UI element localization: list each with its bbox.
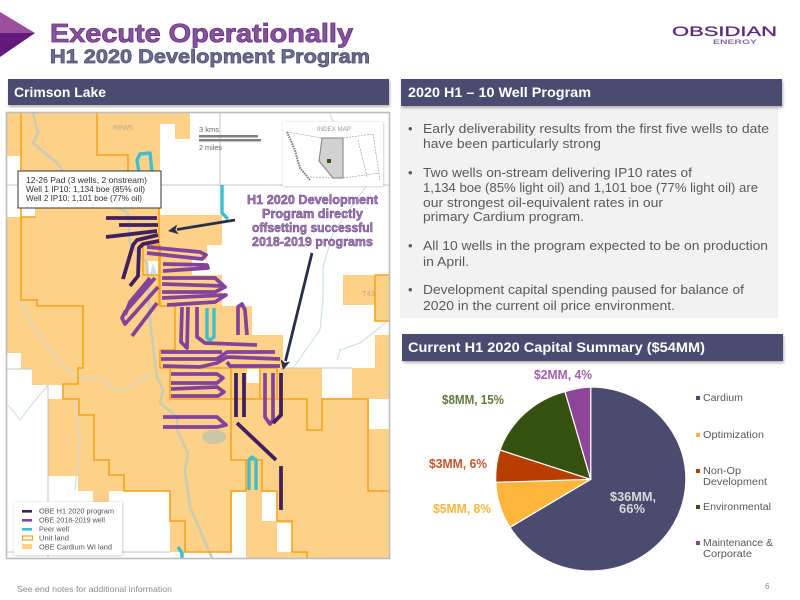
pie data labels: $8MM, 15% [442,393,504,407]
bullet text: Early deliverability results from the first five wells to date [423,121,769,136]
map scale [199,127,261,152]
bullet text: All 10 wells in the program expected to be on production [423,238,768,253]
map labels [113,125,375,298]
annotation: development program [247,193,379,249]
map legend: OBE Cardium WI land [39,542,112,552]
arrow: to 12-26 pad [168,220,235,234]
callout: 12-26 pad: 12-26 Pad (3 wells, 2 onstream) [26,175,147,185]
heading bar: capital summary: Current H1 2020 Capital Summary ($54MM) [408,339,705,355]
heading bar: Crimson Lake [8,79,389,105]
annotation: development program: 2018-2019 programs [252,235,373,249]
wells: OBE H1 2020 program [106,218,281,510]
pie data labels: $5MM, 8% [433,502,491,516]
callout: 12-26 pad [18,171,161,208]
bullet text: our strongest oil-equivalent rates in our [423,195,664,210]
pie legend: Maintenance & [703,538,773,549]
annotation: development program: H1 2020 Development [247,193,379,207]
map labels: R8W5 [113,125,133,132]
bullet text: 2020 in the current oil price environment. [423,298,675,313]
pie chart: capital summary [496,387,686,571]
bullet text: • [408,165,413,180]
bullet text: • [408,121,413,136]
annotation: development program: Program directly [262,207,363,221]
subtitle: H1 2020 Development Program [50,47,370,68]
map labels: T43 [362,291,375,298]
pie data labels: $2MM, 4% [534,368,592,382]
logo: Obsidian Energy [672,23,777,46]
arrow: to southern wells [281,253,312,370]
panel: map [6,112,390,559]
map land: OBE Cardium WI land [7,113,389,558]
map legend: Unit land [39,534,69,542]
unit land boundaries [21,113,389,558]
wells: OBE 2018-2019 [122,247,280,427]
map legend: Peer well [39,524,69,534]
logo: Obsidian Energy: OBSIDIAN [672,23,777,39]
wells: peer [137,153,256,558]
icon: header triangle [0,12,35,57]
inset: index map: INDEX MAP [317,127,351,133]
bullet text: • [408,282,413,297]
map legend: OBE H1 2020 program [39,506,114,516]
pie legend: Corporate [703,549,752,560]
map scale: 3 kms [199,127,220,134]
logo: Obsidian Energy: ENERGY [713,39,758,46]
heading bar: well program [401,79,782,106]
map scale: 2 miles [199,145,223,152]
map legend: OBE 2018-2019 well [39,516,105,524]
pie legend: Environmental [703,502,771,513]
pie legend: Optimization [703,430,764,441]
pie data labels: $36MM, [610,490,656,504]
map rivers [8,113,389,558]
bullet text: have been particularly strong [423,136,601,151]
pie data labels: 66% [619,502,645,516]
callout: 12-26 pad: Well 1 IP10: 1,134 boe (85% oil) [26,184,145,194]
annotation: development program: offsetting successful [252,221,373,235]
pie legend [696,393,773,560]
pie data labels: $3MM, 6% [429,457,487,471]
pie legend: Cardium [703,393,743,404]
bullet text: Two wells on-stream delivering IP10 rates of [423,165,692,180]
pie legend: Development [703,477,767,488]
map legend [14,502,122,555]
bullet text: Development capital spending paused for balance of [423,282,744,297]
heading bar: well program: 2020 H1 – 10 Well Program [408,84,591,100]
heading bar: capital summary [402,334,783,361]
title: Execute Operationally [50,18,354,48]
bullet text [408,121,769,313]
pie data labels [429,368,656,516]
bullet text: • [408,238,413,253]
pie legend: Non-Op [703,466,741,477]
footnote: See end notes for additional information [17,584,172,594]
bullet text: 1,134 boe (85% light oil) and 1,101 boe (77% light oil) are [423,180,758,195]
bullet text: in April. [423,254,469,269]
panel: well program [400,79,782,318]
page number: 6 [765,582,770,591]
bullet text: primary Cardium program. [423,209,584,224]
inset: index map [283,122,383,186]
heading bar: Crimson Lake: Crimson Lake [14,84,106,100]
map grid lines [7,113,389,558]
callout: 12-26 pad: Well 2 IP10: 1,101 boe (77% oil) [26,193,142,203]
